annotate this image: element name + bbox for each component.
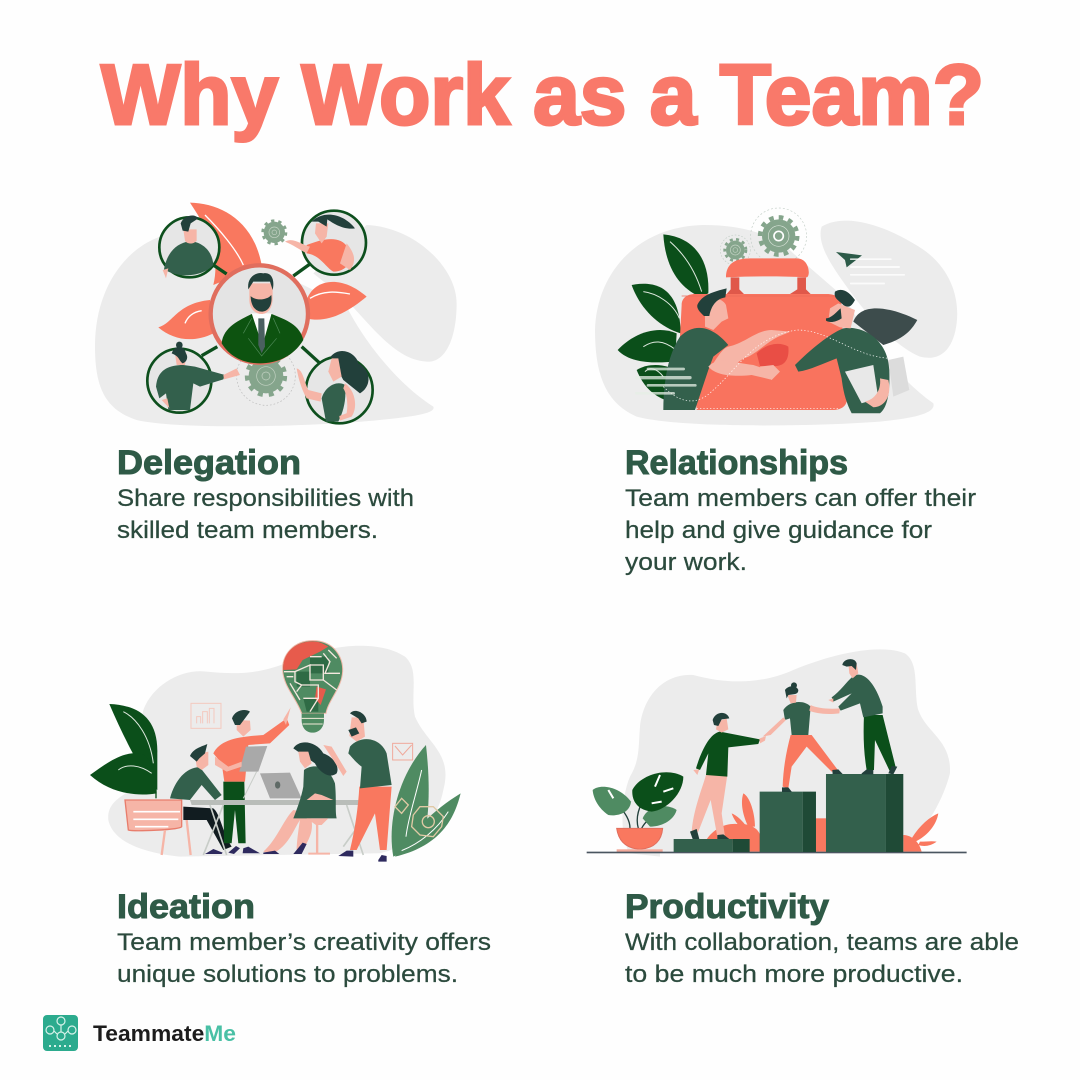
gear: bottom (237, 347, 295, 405)
text: delegation: skilled team members. (117, 517, 378, 544)
person: top helper (828, 659, 897, 774)
mail icon (393, 743, 413, 760)
text: ideation: Team member’s creativity offers (117, 929, 491, 956)
light bulb puzzle (283, 641, 343, 733)
heading: ideation: Ideation (117, 888, 255, 926)
person: seated woman (263, 742, 347, 855)
text: productivity: to be much more productive. (625, 961, 963, 988)
logo wordmark: TeammateMe (93, 1021, 236, 1046)
person: central manager (211, 265, 308, 363)
illustration: ideation (90, 641, 461, 862)
motion lines (635, 368, 697, 395)
plant: right with gears (392, 745, 461, 857)
text: relationships: your work. (625, 549, 747, 576)
text: delegation: Share responsibilities with (117, 485, 414, 512)
person: right (760, 290, 917, 413)
chart icon (191, 703, 221, 728)
text: productivity: With collaboration, teams are able (625, 929, 1019, 956)
person: seated left (170, 744, 232, 854)
person: left (663, 288, 791, 410)
title: Why Work as a Team? (101, 48, 984, 143)
text: ideation: unique solutions to problems. (117, 961, 458, 988)
ground line (587, 852, 967, 853)
text: relationships: Team members can offer their (625, 485, 976, 512)
plant and pot (593, 772, 683, 852)
plant (90, 704, 157, 794)
heading: relationships: Relationships (625, 444, 848, 482)
gear: top (263, 221, 286, 244)
illustration: relationships (595, 208, 957, 425)
heading: delegation: Delegation (117, 444, 301, 482)
person: top right (285, 211, 366, 275)
person: middle climber (763, 682, 843, 792)
briefcase (680, 258, 847, 410)
heading: productivity: Productivity (625, 888, 829, 926)
person: standing with tablet (213, 707, 291, 854)
pot (125, 800, 191, 855)
laptop (260, 773, 302, 798)
person: bottom right (297, 351, 373, 423)
steps (674, 774, 903, 852)
text: relationships: help and give guidance for (625, 517, 932, 544)
illustration: delegation (95, 203, 457, 426)
plant: dark leaves (618, 234, 708, 402)
illustration: productivity (587, 649, 967, 857)
person: bottom left (147, 342, 240, 413)
person: top left (159, 216, 219, 278)
person: standing right (338, 711, 392, 862)
icon: logo mark (43, 1015, 78, 1051)
table (190, 772, 373, 855)
paper plane (836, 252, 862, 267)
gears (751, 208, 807, 264)
person: left climber (690, 713, 766, 839)
logo: TeammateMe (43, 1015, 236, 1051)
coral foliage (707, 793, 938, 852)
